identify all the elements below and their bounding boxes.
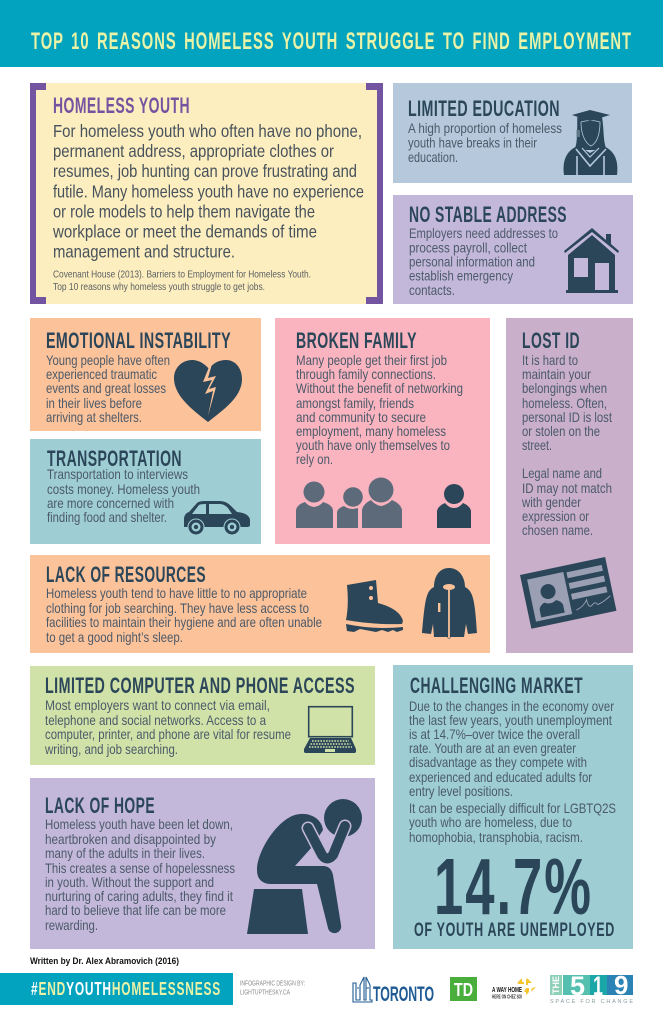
panel: lack of hope [30,778,375,949]
intro text [52,121,364,262]
icon: lone person, dark [437,484,471,528]
logo: toronto [353,977,434,1006]
body text [47,466,200,525]
body text: Legal name and [522,465,602,481]
panel: lack of resources [30,555,490,653]
body text: and community to secure [296,409,426,425]
intro text: workplace or meet the demands of time [52,222,317,242]
body text: experienced traumatic [46,366,157,382]
body text: nurturing of caring adults, they find it [45,888,233,904]
icon: car [184,501,250,535]
logo: the 519: SPACE FOR CHANGE [550,999,633,1005]
left purple bracket [30,83,46,304]
body text: youth have only themselves to [296,437,450,453]
body text: is at 14.7%–over twice the overall [409,726,580,742]
body text: rely on. [296,451,333,467]
body text: computer, printer, and phone are vital for resume [45,726,291,742]
heading: no stable address: NO STABLE ADDRESS [409,202,567,227]
body text: amongst family, friends [296,395,414,411]
body text: contacts. [409,282,455,298]
body text: expression or [522,508,589,524]
logo: a way home [492,978,536,1000]
body text: costs money. Homeless youth [47,481,200,497]
logo: the 519: 5 [570,971,585,1001]
citation [53,268,311,293]
body text [46,352,170,425]
logo: td: TD [454,980,473,1000]
body text: It can be especially difficult for LGBTQ2S [409,800,616,816]
body text: through family connections. [296,366,436,382]
body text: process payroll, collect [409,240,527,256]
logo: a way home: A WAY HOME [492,985,522,994]
header banner [0,0,663,67]
body text: homeless. Often, [522,395,607,411]
icon: despairing seated figure [247,799,362,934]
intro text: resumes, job hunting can prove frustrating and [53,161,357,181]
body text: belongings when [522,380,607,396]
panel: limited computer and phone access [30,666,375,765]
body text: Transportation to interviews [47,466,188,482]
body text: disadvantage as they compete with [409,754,587,770]
body text: the last few years, youth unemployment [409,712,612,728]
body text: arriving at shelters. [46,409,142,425]
body text: personal ID is lost [522,409,612,425]
author credit: Written by Dr. Alex Abramovich (2016) [30,956,179,967]
heading: lack of hope: LACK OF HOPE [45,793,155,818]
body text: Most employers want to connect via email, [45,697,270,713]
intro text: futile. Many homeless youth have no experience [53,182,364,202]
icon: boot [346,580,403,632]
design credit [240,980,305,996]
hashtag text: #ENDYOUTHHOMELESSNESS [31,979,221,999]
body text: homophobia, transphobia, racism. [409,829,583,845]
heading: transportation: TRANSPORTATION [47,446,182,471]
icon: laptop [304,707,356,753]
body text: establish emergency [409,268,513,284]
body text: personal information and [409,254,535,270]
panel: limited education [393,83,632,183]
body text: are more concerned with [47,495,174,511]
heading: broken family: BROKEN FAMILY [296,328,417,353]
hashtag banner [0,973,233,1005]
heading: homeless youth: HOMELESS YOUTH [53,93,190,118]
logo: the 519: THE [551,976,561,994]
logo: the 519 [550,970,633,1005]
design credit: INFOGRAPHIC DESIGN BY: [240,980,305,988]
heading: lost id: LOST ID [522,328,580,353]
logo: the 519: 1 [593,971,603,1001]
panel: emotional instability [30,318,261,431]
panel: broken family [275,318,490,544]
body text: This creates a sense of hopelessness [45,860,235,876]
body text [521,352,612,538]
body text: education. [408,149,458,165]
icon: house [564,228,619,293]
body text: Young people have often [46,352,170,368]
right purple bracket [366,83,383,304]
body text [409,225,558,298]
icon: family of three, grey [296,478,402,528]
body text: telephone and social networks. Access to a [45,712,266,728]
body text: in youth. Without the support and [45,874,214,890]
panel: no stable address [393,195,633,304]
design credit: LIGHTUPTHESKY.CA [240,990,290,996]
body text: employment, many homeless [296,423,446,439]
panel: homeless youth [30,83,383,304]
body text: youth who are homeless, due to [409,814,572,830]
body text: chosen name. [522,522,593,538]
body text: or stolen on the [522,423,600,439]
intro text: permanent address, appropriate clothes or [53,141,334,161]
heading: emotional instability: EMOTIONAL INSTABILITY [46,328,231,353]
icon: id card [520,557,616,629]
body text: with gender [521,494,581,510]
body text: maintain your [522,366,591,382]
heading: limited education: LIMITED EDUCATION [408,96,560,121]
body text [409,698,616,845]
body text: rate. Youth are at an even greater [409,740,576,756]
body text: in their lives before [46,395,142,411]
logo: the 519: 9 [614,970,628,1000]
body text: Homeless youth tend to have little to no appropriate [46,585,307,601]
panel: transportation [30,439,261,544]
heading: lack of resources: LACK OF RESOURCES [46,562,206,587]
body text: Homeless youth have been let down, [45,816,233,832]
body text: to get a good night’s sleep. [46,629,183,645]
body text: hard to believe that life can be more [45,902,226,918]
body text [44,697,291,757]
intro text: or role models to help them navigate the [53,202,315,222]
body text [296,352,463,467]
body text: Employers need addresses to [409,225,558,241]
body text: Due to the changes in the economy over [409,698,614,714]
body text: events and great losses [46,380,166,396]
body text: ID may not match [522,480,612,496]
body text: It is hard to [522,352,578,368]
body text: finding food and shelter. [47,509,167,525]
body text: many of the adults in their lives. [45,845,205,861]
body text: experienced and educated adults for [409,769,592,785]
body text: street. [522,437,552,453]
panel: challenging market [393,665,633,949]
body text [408,120,562,165]
panel: lost id [506,318,633,653]
logo: toronto: TORONTO [373,983,434,1006]
body text: Many people get their first job [296,352,447,368]
intro text: management and structure. [53,242,235,262]
body text: clothing for job searching. They have less access to [46,600,309,616]
body text: heartbroken and disappointed by [45,831,216,847]
body text: entry level positions. [409,783,513,799]
heading: limited computer and phone access: LIMITED COMPUTER AND PHONE ACCESS [45,673,355,698]
body text: rewarding. [45,917,98,933]
body text: A high proportion of homeless [408,120,562,136]
icon: graduate [564,110,617,175]
logo: a way home: HERE ON CHEZ SOI [492,994,522,1000]
body text [45,816,235,933]
body text: Without the benefit of networking [296,380,463,396]
body text: youth have breaks in their [408,134,537,150]
body text: writing, and job searching. [44,741,178,757]
icon: jacket [422,568,477,639]
body text [46,585,322,645]
body text: facilities to maintain their hygiene and are often unable [46,614,322,630]
icon: broken heart [174,360,242,422]
citation: Top 10 reasons why homeless youth struggle to get jobs. [53,281,265,293]
logo: td [450,977,477,1001]
citation: Covenant House (2013). Barriers to Employment for Homeless Youth. [53,268,311,280]
intro text: For homeless youth who often have no phone, [53,121,362,141]
